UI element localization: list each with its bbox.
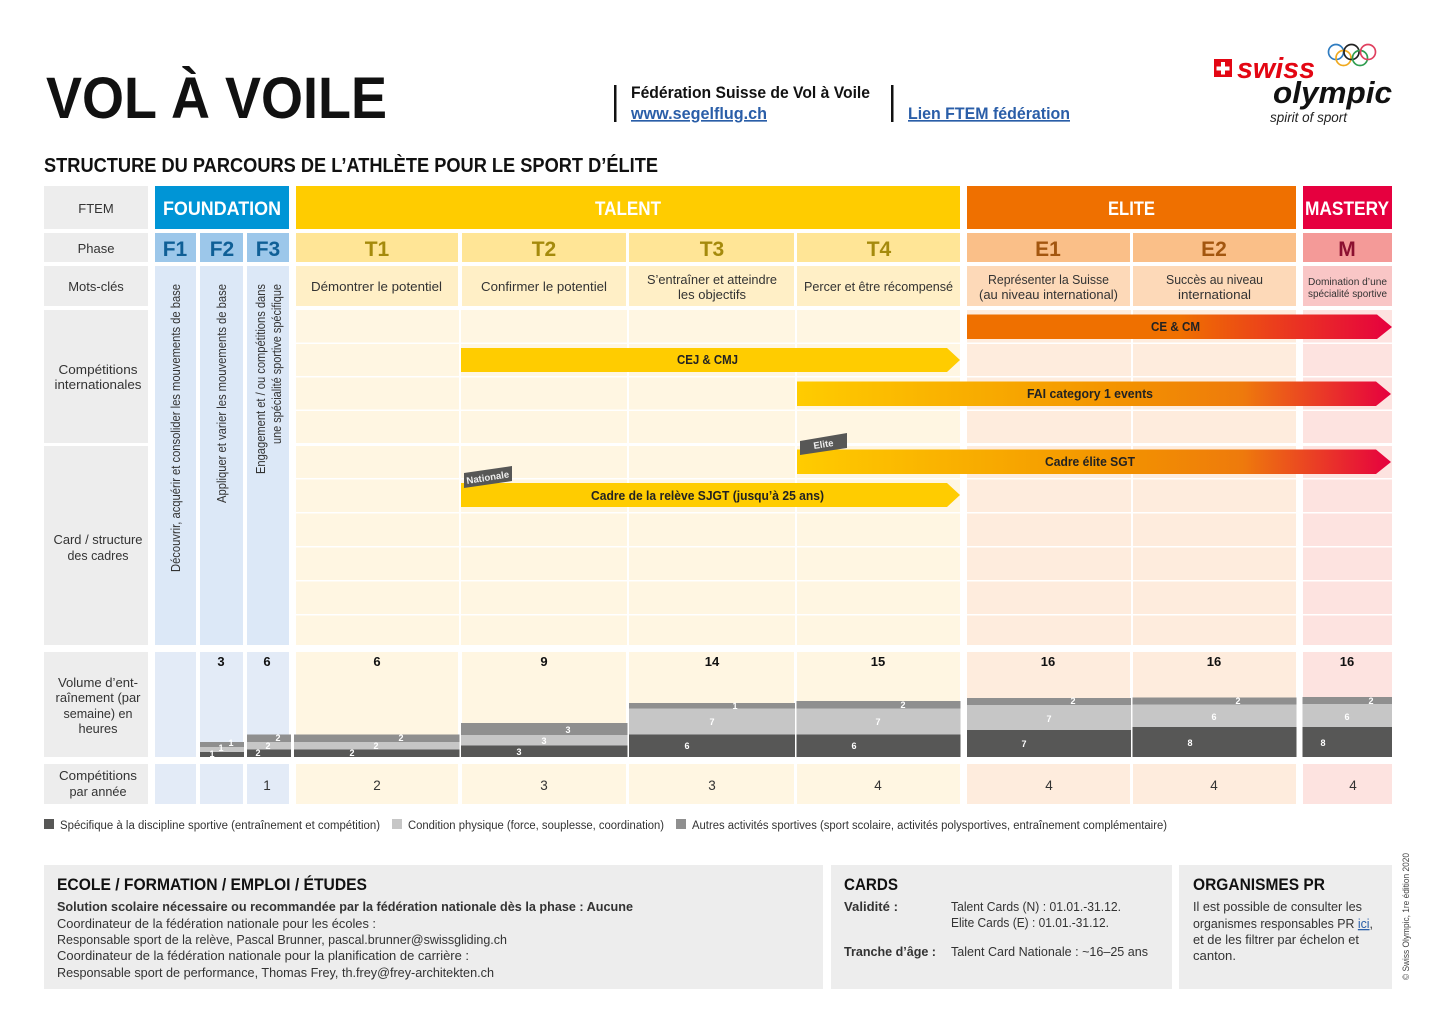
phase row: F2 [210, 238, 234, 261]
keywords row: Percer et être récompensé [804, 279, 953, 294]
panel: school / education: Coordinateur de la fédération nationale pour les écoles : [57, 916, 376, 931]
competitions per year row: 1 [263, 778, 271, 793]
row labels column [44, 186, 148, 804]
bar totals: 15 [871, 654, 885, 669]
bar values: 8 [1320, 738, 1326, 748]
bar values: 2 [398, 733, 404, 743]
row labels column: Compétitions [58, 362, 138, 377]
competitions per year row [155, 764, 1392, 804]
bar values: 2 [265, 741, 271, 751]
competitions per year row: 4 [874, 778, 882, 793]
bars: physical condition [200, 704, 1392, 752]
panel: PR organisations: et de les filtrer par échelon et [1193, 932, 1359, 947]
panel: school / education: Responsable sport de la relève, Pascal Brunner, pascal.brunner@swissgliding.ch [57, 932, 507, 947]
phase row: M [1338, 238, 1356, 261]
panel: PR organisations: canton. [1193, 948, 1236, 963]
legend: Condition physique (force, souplesse, coordination) [408, 820, 664, 832]
bar values: 6 [851, 741, 857, 751]
bar totals: 6 [263, 654, 271, 669]
FTEM header band: TALENT [595, 199, 661, 220]
phase row: T1 [365, 238, 390, 261]
keywords row: Succès au niveau [1166, 272, 1263, 287]
bar values: 6 [1211, 712, 1217, 722]
tag: Elite: Elite [813, 438, 834, 452]
bar values: 1 [209, 749, 215, 759]
bar values: 3 [541, 736, 547, 746]
phase row: E1 [1035, 238, 1061, 261]
row labels column: des cadres [68, 548, 129, 563]
federation contact [614, 84, 870, 123]
foundation descriptions (vertical): une spécialité sportive spécifique [270, 284, 284, 444]
foundation descriptions (vertical): Découvrir, acquérir et consolider les mouvements de base [169, 284, 183, 572]
arrow: CE & CM [967, 314, 1392, 339]
panel: cards: Elite Cards (E) : 01.01.-31.12. [951, 915, 1109, 930]
panel: cards: Talent Card Nationale : ~16–25 ans [951, 944, 1148, 959]
keywords row: S’entraîner et atteindre [647, 272, 777, 287]
row labels column: Volume d’ent- [58, 675, 138, 690]
keywords row: Représenter la Suisse [988, 272, 1109, 287]
bar values: 1 [218, 743, 224, 753]
row labels column: par année [70, 784, 126, 799]
panel: cards: CARDS [844, 875, 898, 894]
arrow: Cadre élite SGT [797, 450, 1391, 474]
bar values: 7 [1021, 739, 1027, 749]
keywords row: international [1178, 287, 1251, 302]
row labels column: internationales [54, 377, 142, 392]
legend: Autres activités sportives (sport scolaire, activités polysportives, entraînement complémentaire) [692, 820, 1167, 832]
bar values: 2 [275, 733, 281, 743]
keywords row: Domination d’une [1308, 277, 1387, 288]
row labels column: FTEM [78, 201, 114, 216]
tag: Nationale: Nationale [466, 469, 510, 487]
bar values: 1 [732, 701, 738, 711]
foundation descriptions (vertical): Engagement et / ou compétitions dans [254, 284, 268, 474]
panel: cards: Validité : [844, 899, 898, 914]
legend: Spécifique à la discipline sportive (entraînement et compétition) [60, 820, 380, 832]
keywords row: spécialité sportive [1308, 289, 1387, 300]
phase row [155, 233, 1392, 262]
bar values [209, 696, 1374, 759]
FTEM header band: MASTERY [1305, 199, 1389, 220]
federation contact: Fédération Suisse de Vol à Voile [631, 84, 870, 102]
keywords row [296, 266, 1392, 306]
phase row: T4 [867, 238, 892, 261]
bar values: 7 [1046, 714, 1052, 724]
bar values: 2 [1235, 696, 1241, 706]
federation contact: www.segelflug.ch [630, 105, 767, 123]
panel: PR organisations: organismes responsables PR ici, [1193, 916, 1373, 931]
bar values: 2 [1070, 696, 1076, 706]
tag: Elite [800, 433, 847, 455]
bars: other activities [200, 697, 1392, 747]
panel: PR organisations: ORGANISMES PR [1193, 875, 1325, 894]
copyright note: © Swiss Olympic, 1re édition 2020 [1401, 853, 1411, 980]
competitions per year row: 2 [373, 778, 381, 793]
bar values: 6 [684, 741, 690, 751]
panel: school / education [44, 865, 823, 989]
FTEM header band: ELITE [1108, 199, 1155, 220]
FTEM header band: FOUNDATION [163, 199, 281, 220]
arrow: CEJ & CMJ [461, 348, 960, 372]
subtitle: STRUCTURE DU PARCOURS DE L’ATHLÈTE POUR LE SPORT D’ÉLITE [44, 154, 658, 177]
competitions per year row: 3 [708, 778, 716, 793]
logo: swiss olympic: olympic [1273, 75, 1392, 110]
row labels column: Card / structure [54, 532, 142, 547]
competitions per year row: 4 [1349, 778, 1357, 793]
arrow: Cadre élite SGT: Cadre élite SGT [1045, 454, 1135, 469]
phase row: F3 [256, 238, 280, 261]
competitions per year row: 4 [1210, 778, 1218, 793]
keywords row: les objectifs [678, 287, 746, 302]
panel: PR organisations: Il est possible de consulter les [1193, 899, 1362, 914]
arrow: Cadre de la relève SJGT [461, 483, 960, 507]
arrow: CE & CM: CE & CM [1151, 319, 1200, 334]
bar values: 2 [1368, 696, 1374, 706]
logo: swiss olympic: spirit of sport [1270, 109, 1348, 125]
bar values: 8 [1187, 738, 1193, 748]
bar totals: 3 [217, 654, 225, 669]
bar values: 2 [900, 700, 906, 710]
title: VOL À VOILE [46, 66, 387, 131]
logo: swiss olympic [1214, 44, 1392, 125]
phase row: E2 [1201, 238, 1227, 261]
arrow: Cadre de la relève SJGT: Cadre de la relève SJGT (jusqu’à 25 ans) [591, 488, 824, 503]
row labels column: Compétitions [59, 768, 138, 783]
arrow: FAI category 1 events [797, 382, 1391, 406]
panel: school / education: Coordinateur de la fédération nationale pour la planification de carrière : [57, 948, 469, 963]
panel: cards: Tranche d’âge : [844, 944, 936, 959]
bar values: 2 [255, 748, 261, 758]
phase row: F1 [163, 238, 188, 261]
foundation descriptions (vertical) [155, 266, 289, 645]
legend [44, 819, 1167, 832]
row labels column: Mots-clés [68, 279, 124, 294]
foundation descriptions (vertical): Appliquer et varier les mouvements de base [215, 284, 229, 503]
panel: school / education: Responsable sport de performance, Thomas Frey, th.frey@frey-architekten.ch [57, 965, 494, 980]
bar values: 1 [228, 738, 234, 748]
logo: swiss olympic: swiss [1237, 53, 1315, 85]
keywords row: Démontrer le potentiel [311, 279, 442, 294]
bar totals [217, 654, 1354, 669]
bar totals: 14 [705, 654, 720, 669]
bar values: 6 [1344, 712, 1350, 722]
row labels column: Phase [78, 241, 114, 256]
arrow: FAI category 1 events: FAI category 1 events [1027, 386, 1153, 401]
row labels column: heures [78, 721, 118, 736]
bar totals: 16 [1340, 654, 1354, 669]
panel: school / education: Solution scolaire nécessaire ou recommandée par la fédération nationale dès la phase : Aucune [57, 899, 633, 914]
phase row: T2 [532, 238, 556, 261]
bar values: 3 [565, 725, 571, 735]
keywords row: Confirmer le potentiel [481, 279, 607, 294]
panel: school / education: ECOLE / FORMATION / EMPLOI / ÉTUDES [57, 875, 367, 894]
competitions per year row: 4 [1045, 778, 1053, 793]
phase row: T3 [700, 238, 724, 261]
panel: PR organisations [1179, 865, 1392, 989]
bar totals: 9 [540, 654, 548, 669]
bar values: 2 [373, 741, 379, 751]
bars: specific discipline [200, 727, 1392, 757]
bar values: 7 [709, 717, 715, 727]
bar values: 3 [516, 747, 522, 757]
pathway grid background [296, 310, 1392, 645]
FTEM federation link: Lien FTEM fédération [908, 105, 1070, 123]
bar values: 2 [349, 748, 355, 758]
competitions per year row: 3 [540, 778, 548, 793]
bar totals: 16 [1207, 654, 1221, 669]
row labels column: semaine) en [64, 706, 132, 721]
FTEM header band [155, 186, 1392, 229]
keywords row: (au niveau international) [979, 287, 1118, 302]
bar totals: 16 [1041, 654, 1055, 669]
bar values: 7 [875, 717, 881, 727]
arrow: CEJ & CMJ: CEJ & CMJ [677, 352, 738, 367]
panel: cards: Talent Cards (N) : 01.01.-31.12. [951, 899, 1121, 914]
training volume chart [155, 652, 1392, 759]
row labels column: raînement (par [56, 690, 141, 705]
panel: cards [831, 865, 1172, 989]
bar totals: 6 [373, 654, 381, 669]
